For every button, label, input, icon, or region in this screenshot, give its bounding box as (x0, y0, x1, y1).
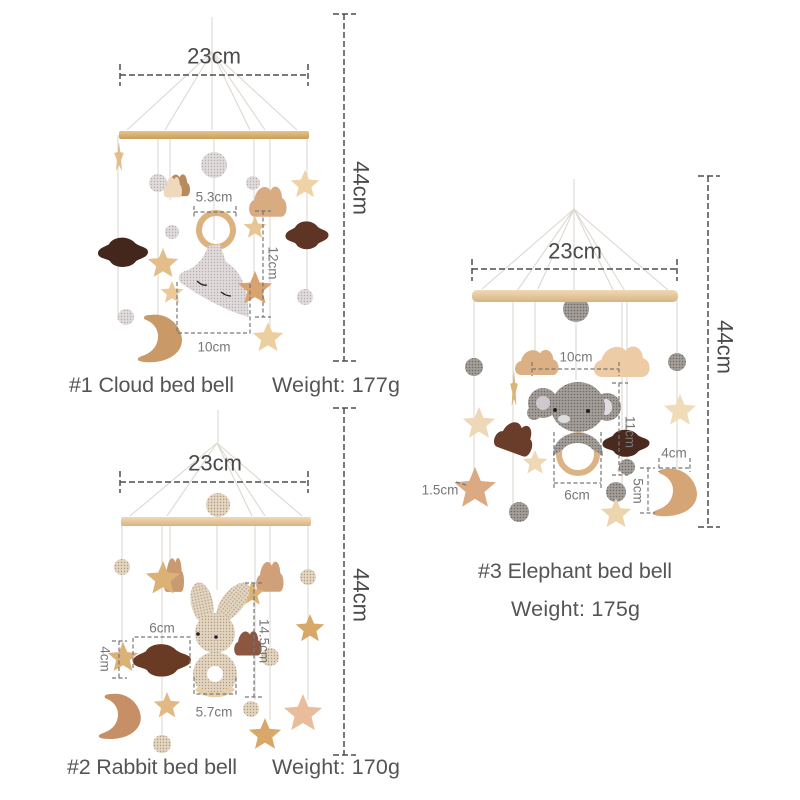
height dimension 44cm (333, 14, 374, 361)
label: elephant weight: Weight: 175g (511, 597, 640, 621)
wooden cloud (249, 187, 287, 217)
crochet ball (153, 735, 171, 753)
label: elephant bed bell: #3 Elephant bed bell (478, 559, 672, 583)
wooden star large (454, 467, 496, 507)
wooden moon (99, 694, 141, 739)
crochet ball top (206, 493, 230, 517)
label: rabbit bed bell: #2 Rabbit bed bell (67, 755, 237, 779)
crochet ball (606, 482, 626, 502)
wooden star (240, 581, 264, 605)
crochet ball (243, 701, 259, 717)
crochet ball (118, 309, 134, 325)
wooden star large (284, 694, 322, 730)
crochet ball large (201, 152, 227, 178)
width dimension 4cm (659, 446, 690, 472)
height dimension 44cm (333, 408, 374, 755)
wooden cloud behind star (164, 558, 184, 592)
width dimension 6cm: 6cm (149, 620, 175, 636)
crochet ball (300, 569, 316, 585)
crochet ball small (165, 225, 179, 239)
width dimension 23cm: 23cm (187, 44, 241, 68)
width dimension 23cm (120, 44, 308, 86)
wooden star thin (510, 370, 518, 406)
height dimension 14.5cm: 14.5cm (256, 619, 272, 663)
width dimension 4cm: 4cm (661, 446, 687, 460)
crochet ball top (563, 296, 589, 322)
label: cloud bed bell: #1 Cloud bed bell (69, 373, 234, 397)
walnut planet (602, 430, 650, 457)
height dimension 44cm (698, 176, 738, 527)
walnut planet left (98, 238, 148, 267)
mobile 3 dimensions (422, 176, 738, 527)
wooden cloud (515, 350, 559, 375)
crochet ball (297, 289, 313, 305)
wooden hoop (472, 290, 678, 302)
height dimension 5cm: 5cm (630, 478, 646, 504)
height dimension 44cm: 44cm (348, 568, 374, 622)
height dimension 44cm: 44cm (712, 320, 738, 374)
width dimension 6cm: 6cm (564, 488, 590, 502)
hanging strings (118, 17, 307, 340)
label: cloud weight: Weight: 177g (272, 373, 400, 397)
height dimension 4cm: 4cm (98, 646, 112, 672)
width dimension 6cm (554, 432, 601, 502)
walnut cloud (492, 417, 538, 458)
wooden star (253, 322, 283, 351)
mobile 1: cloud bed bell (98, 17, 328, 362)
wooden star (161, 281, 183, 303)
height dimension 4cm (98, 641, 127, 678)
width dimension 10cm: 10cm (559, 350, 593, 364)
wooden star (296, 614, 324, 641)
crochet ball (261, 648, 279, 666)
hanging strings (474, 179, 677, 510)
height dimension 11cm: 11cm (622, 416, 638, 448)
wooden cloud (594, 346, 650, 377)
hanging strings (122, 410, 308, 740)
walnut planet (133, 644, 191, 677)
wooden star (463, 407, 495, 438)
crochet ball (668, 353, 686, 371)
crochet ball (465, 358, 483, 376)
crochet ball (509, 502, 529, 522)
walnut cloud (234, 631, 262, 656)
wooden star (108, 642, 138, 671)
crochet elephant toy (527, 382, 621, 473)
wooden moon (653, 469, 697, 516)
wooden star (154, 692, 180, 717)
width dimension 10cm: 10cm (197, 340, 231, 354)
ring dimension 5.3cm (194, 190, 236, 219)
wooden star large (238, 271, 272, 304)
wooden moon (138, 315, 182, 362)
height dimension 12cm: 12cm (266, 246, 280, 280)
wooden star (244, 216, 266, 238)
height dimension 44cm: 44cm (348, 161, 374, 215)
wooden star (146, 561, 180, 594)
width dimension 10cm (177, 282, 250, 354)
wooden star (249, 718, 281, 749)
wooden star (114, 142, 124, 171)
crochet ball (149, 174, 167, 192)
wooden hoop (121, 517, 311, 526)
width dimension 10cm (532, 350, 619, 376)
wooden star (601, 498, 631, 527)
width dimension 23cm (472, 238, 677, 281)
width dimension 5.7cm: 5.7cm (196, 704, 232, 720)
crochet cloud toy (179, 244, 249, 317)
wooden star (148, 248, 178, 277)
label: rabbit weight: Weight: 170g (272, 755, 400, 779)
mobile 2 dimensions (98, 408, 374, 755)
crochet ball (114, 559, 130, 575)
mobile 2: rabbit bed bell (99, 410, 324, 753)
height dimension 5cm (630, 468, 655, 513)
width dimension 5.7cm (194, 677, 236, 720)
width dimension 6cm (133, 620, 190, 668)
mobile 1 dimensions (120, 14, 374, 361)
thickness dimension 1.5cm: 1.5cm (422, 482, 458, 498)
crochet ball small (246, 176, 260, 190)
height dimension 14.5cm (245, 583, 272, 697)
mobile 3: elephant bed bell (454, 179, 697, 527)
walnut planet right (286, 221, 328, 249)
width dimension 23cm: 23cm (548, 238, 602, 264)
height dimension 12cm (255, 211, 280, 317)
wooden star (664, 394, 696, 425)
wooden cloud small (164, 174, 190, 197)
crochet rabbit toy (187, 577, 256, 695)
wooden star (523, 450, 547, 474)
wooden teether ring (199, 213, 233, 247)
crochet ball (619, 459, 635, 475)
wooden star (291, 170, 319, 197)
width dimension 23cm: 23cm (188, 450, 242, 476)
width dimension 23cm (120, 450, 308, 493)
height dimension 11cm (612, 383, 638, 475)
wooden hoop (119, 131, 309, 139)
ring dimension 5.3cm: 5.3cm (196, 190, 232, 204)
wooden cloud (256, 562, 284, 592)
